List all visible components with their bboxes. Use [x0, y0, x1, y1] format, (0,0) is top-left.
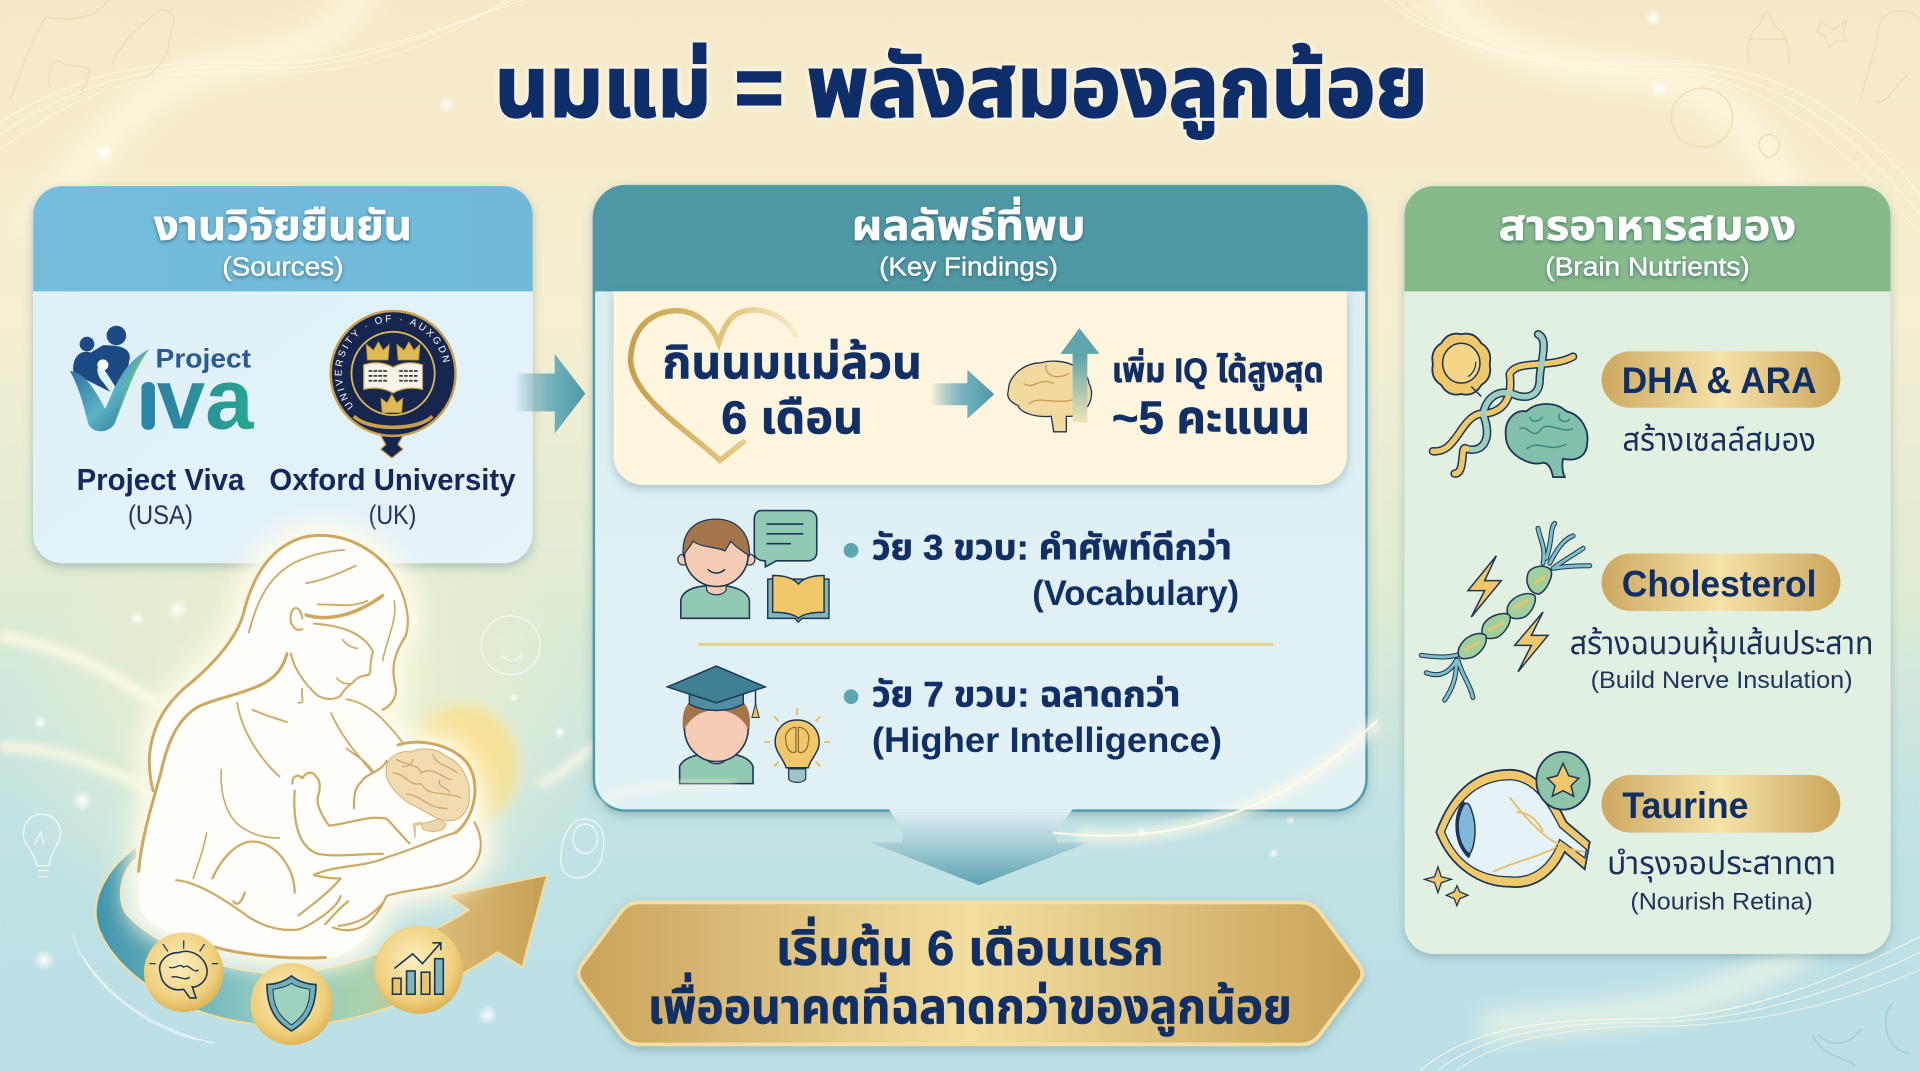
label: Project Viva: Project Viva [77, 463, 245, 497]
label: Project Viva: (USA) [128, 500, 193, 530]
banner: call to action: เพื่ออนาคตที่ฉลาดกว่าของลูกน้อย [648, 972, 1292, 1037]
label: Oxford University: (UK) [369, 500, 416, 530]
pill: DHA & ARA [1602, 351, 1840, 408]
heading: sources [154, 202, 412, 281]
bullet [844, 689, 858, 704]
text: vocabulary: (Vocabulary) [1032, 573, 1239, 613]
label: Oxford University: Oxford University [269, 463, 516, 497]
label: Project Viva [77, 463, 245, 530]
heading: sources: งานวิจัยยืนยัน [154, 202, 412, 249]
text: intelligence: (Higher Intelligence) [872, 720, 1222, 760]
pill: cholesterol [1602, 553, 1840, 611]
pill: taurine [1602, 775, 1840, 833]
icon: brain with up arrow [1008, 328, 1100, 432]
text: nerve insulation [1570, 625, 1873, 694]
label: Oxford University [269, 463, 516, 530]
text: intelligence: วัย 7 ขวบ: ฉลาดกว่า [872, 674, 1180, 714]
banner: call to action: เริ่มต้น 6 เดือนแรก [776, 917, 1164, 976]
text: vocabulary: วัย 3 ขวบ: คำศัพท์ดีกว่า [872, 528, 1232, 568]
golden glow behind baby head [398, 694, 528, 838]
heading: nutrients: สารอาหารสมอง [1499, 202, 1796, 249]
text: intelligence [872, 674, 1222, 760]
arrow: down to banner [871, 809, 1089, 885]
icon: child with speech and book [678, 511, 829, 622]
divider [698, 643, 1273, 646]
nutrient: DHA and ARA [1432, 334, 1840, 477]
heading: key findings [852, 196, 1086, 281]
panel body: nutrients [1404, 186, 1891, 954]
text: nerve insulation: สร้างฉนวนหุ้มเส้นประสาท [1570, 625, 1873, 662]
title: นมแม่ = พลังสมองลูกน้อย [495, 39, 1428, 139]
highlight card [613, 291, 1347, 485]
logo: Oxford seal [329, 310, 457, 459]
banner: call to action [579, 902, 1362, 1044]
icon: graduate and idea bulb [667, 666, 830, 784]
benefit medallions [144, 926, 463, 1045]
text: IQ result: ~5 คะแนน [1112, 391, 1310, 443]
logo: Project Viva: Project [156, 343, 251, 373]
panel: key findings [594, 186, 1367, 811]
text: build brain cells: สร้างเซลล์สมอง [1622, 422, 1816, 458]
heading: sources: (Sources) [222, 253, 344, 281]
icon: shield medallion [250, 963, 332, 1045]
text: nourish retina: บำรุงจอประสาทตา [1607, 845, 1836, 882]
logo: Oxford seal: UNIVERSITY · OF · AUXGDN [334, 315, 450, 410]
text: exclusive breastfeeding: 6 เดือน [721, 391, 863, 443]
heading: nutrients: (Brain Nutrients) [1545, 253, 1750, 281]
text: exclusive breastfeeding: กินนมแม่ล้วน [662, 336, 922, 388]
icon: growth chart medallion [375, 926, 463, 1014]
panel body: key findings [594, 186, 1367, 811]
panel: brain nutrients [1404, 186, 1891, 954]
icon: DHA helix and brain [1432, 334, 1588, 477]
icon: heart outline [631, 310, 796, 460]
text: vocabulary [872, 528, 1239, 613]
logo: Project Viva [70, 326, 255, 448]
nutrient: taurine [1425, 752, 1840, 916]
logo: Project Viva: va [157, 352, 255, 448]
finding: age 3 [678, 511, 1239, 622]
baby brain [386, 749, 469, 838]
swoosh over findings panel [598, 720, 1378, 837]
mother and baby illustration [73, 534, 547, 1044]
arrow: sources to findings [514, 354, 585, 433]
nutrient: cholesterol [1421, 523, 1873, 700]
mother silhouette [139, 534, 482, 958]
panel header: sources [33, 186, 533, 291]
icon: brain medallion [144, 932, 224, 1012]
text: IQ result [1112, 348, 1324, 443]
heading: nutrients [1499, 202, 1796, 281]
pill: DHA & ARA: DHA & ARA [1622, 360, 1816, 401]
heading: key findings: ผลลัพธ์ที่พบ [852, 196, 1086, 249]
arrow: to brain [931, 370, 994, 419]
text: exclusive breastfeeding [662, 336, 922, 443]
bullet [844, 543, 858, 558]
text: nourish retina: (Nourish Retina) [1630, 889, 1813, 916]
text: IQ result: เพิ่ม IQ ได้สูงสุด [1112, 348, 1324, 391]
heading: key findings: (Key Findings) [879, 253, 1058, 281]
icon: eye with star [1425, 752, 1590, 906]
finding: age 7 [667, 666, 1222, 784]
text: nerve insulation: (Build Nerve Insulation) [1591, 667, 1853, 694]
icon: nerve with myelin [1421, 523, 1590, 700]
pill: cholesterol: Cholesterol [1622, 563, 1816, 604]
text: nourish retina [1607, 845, 1836, 916]
growth ribbon arrow [73, 847, 547, 1044]
pill: taurine: Taurine [1622, 785, 1749, 826]
panel: sources [33, 186, 533, 563]
